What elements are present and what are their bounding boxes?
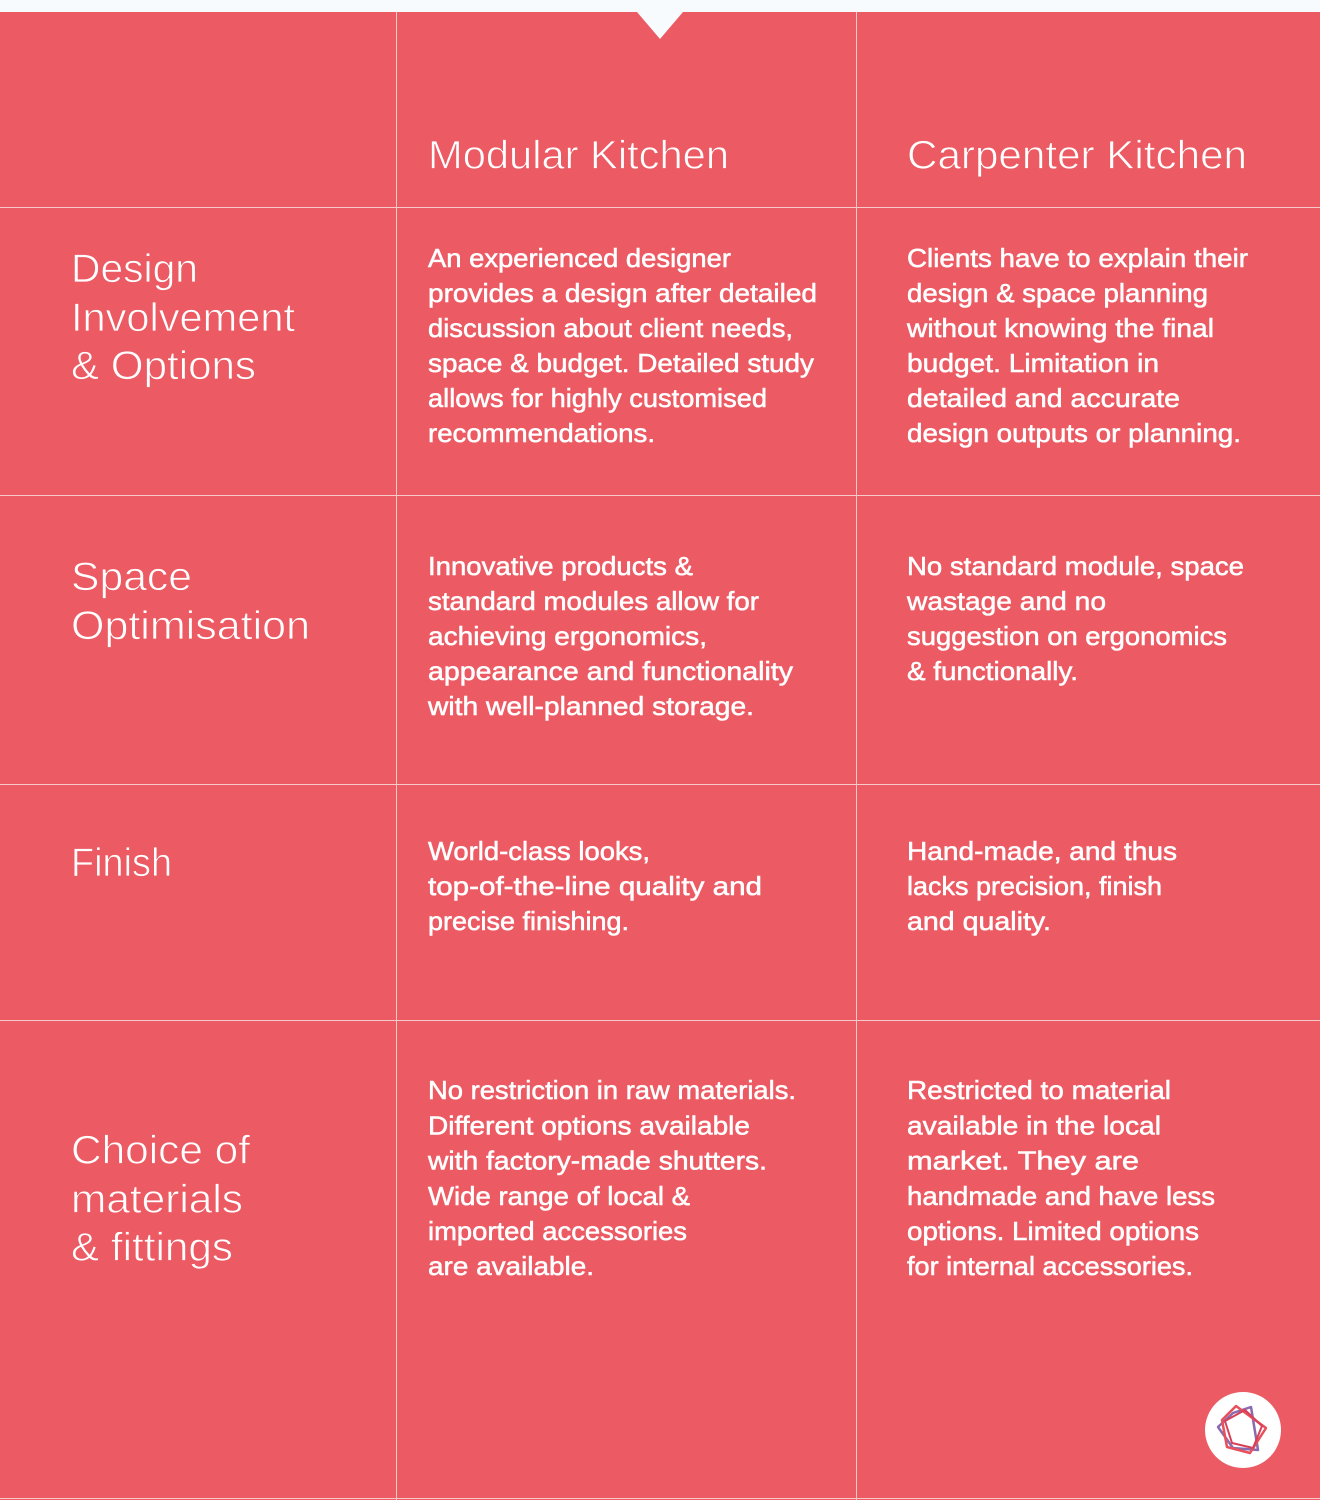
carpenter: design text: without knowing the final <box>906 313 1214 343</box>
carpenter: space text: wastage and no <box>906 586 1106 616</box>
top notch arrow <box>637 12 683 39</box>
carpenter: design text: detailed and accurate <box>907 383 1180 413</box>
carpenter: materials text: available in the local <box>907 1110 1161 1140</box>
carpenter: materials text: options. Limited options <box>907 1216 1199 1246</box>
row heading: Space Optimisation: Optimisation <box>71 604 310 648</box>
modular: space text: standard modules allow for <box>428 586 759 616</box>
carpenter: space text: No standard module, space <box>907 551 1244 581</box>
carpenter: space text: suggestion on ergonomics <box>907 621 1227 651</box>
modular: finish text <box>428 836 762 936</box>
column heading: Modular Kitchen: Modular Kitchen <box>428 134 729 178</box>
row heading: Choice of materials & fittings <box>71 1128 251 1270</box>
carpenter: space text: & functionally. <box>907 656 1078 686</box>
row heading: Choice of materials & fittings: & fittings <box>71 1226 233 1270</box>
row heading: Finish: Finish <box>71 841 172 885</box>
carpenter: materials text: market. They are <box>907 1146 1139 1176</box>
column heading: Carpenter Kitchen: Carpenter Kitchen <box>907 134 1247 178</box>
modular: finish text: top-of-the-line quality and <box>428 871 762 901</box>
modular: materials text: Wide range of local & <box>428 1181 690 1211</box>
row heading: Choice of materials & fittings: materials <box>71 1178 243 1222</box>
modular: materials text: Different options available <box>428 1110 750 1140</box>
carpenter: design text: design & space planning <box>907 278 1208 308</box>
modular: materials text: with factory-made shutters. <box>427 1146 767 1176</box>
modular: space text: with well-planned storage. <box>427 691 754 721</box>
carpenter: design text <box>906 243 1248 448</box>
row heading: Choice of materials & fittings: Choice of <box>71 1128 251 1172</box>
modular: design text: recommendations. <box>428 418 655 448</box>
modular: materials text: are available. <box>428 1251 594 1281</box>
row heading: Design Involvement & Options: Involvement <box>71 296 295 340</box>
modular: materials text <box>427 1075 796 1281</box>
carpenter: finish text: and quality. <box>907 906 1051 936</box>
row heading: Design Involvement & Options <box>71 247 295 388</box>
carpenter: design text: Clients have to explain their <box>907 243 1248 273</box>
modular: space text: Innovative products & <box>428 551 693 581</box>
carpenter: finish text: lacks precision, finish <box>907 871 1162 901</box>
carpenter: design text: design outputs or planning. <box>907 418 1241 448</box>
modular: design text <box>428 243 817 448</box>
modular: design text: space & budget. Detailed study <box>428 348 814 378</box>
row heading: Design Involvement & Options: Design <box>71 247 198 291</box>
modular: space text: appearance and functionality <box>428 656 793 686</box>
carpenter: finish text <box>907 836 1177 936</box>
carpenter: finish text: Hand-made, and thus <box>907 836 1177 866</box>
modular: materials text: No restriction in raw materials. <box>428 1075 796 1105</box>
carpenter: materials text <box>907 1075 1215 1281</box>
modular: materials text: imported accessories <box>428 1216 687 1246</box>
row heading: Space Optimisation: Space <box>71 555 192 599</box>
modular: space text <box>427 551 793 721</box>
carpenter: materials text: for internal accessories. <box>907 1251 1193 1281</box>
modular: design text: allows for highly customised <box>428 383 767 413</box>
modular: finish text: World-class looks, <box>428 836 650 866</box>
modular: design text: provides a design after detailed <box>428 278 817 308</box>
row heading: Design Involvement & Options: & Options <box>71 344 256 388</box>
icon: pentagon logo badge <box>1205 1392 1281 1468</box>
row heading: Space Optimisation <box>71 555 310 648</box>
modular: space text: achieving ergonomics, <box>428 621 707 651</box>
modular: finish text: precise finishing. <box>428 906 629 936</box>
carpenter: space text <box>906 551 1244 686</box>
modular: design text: An experienced designer <box>428 243 731 273</box>
carpenter: materials text: Restricted to material <box>907 1075 1171 1105</box>
modular: design text: discussion about client needs, <box>428 313 793 343</box>
carpenter: materials text: handmade and have less <box>907 1181 1215 1211</box>
carpenter: design text: budget. Limitation in <box>907 348 1159 378</box>
